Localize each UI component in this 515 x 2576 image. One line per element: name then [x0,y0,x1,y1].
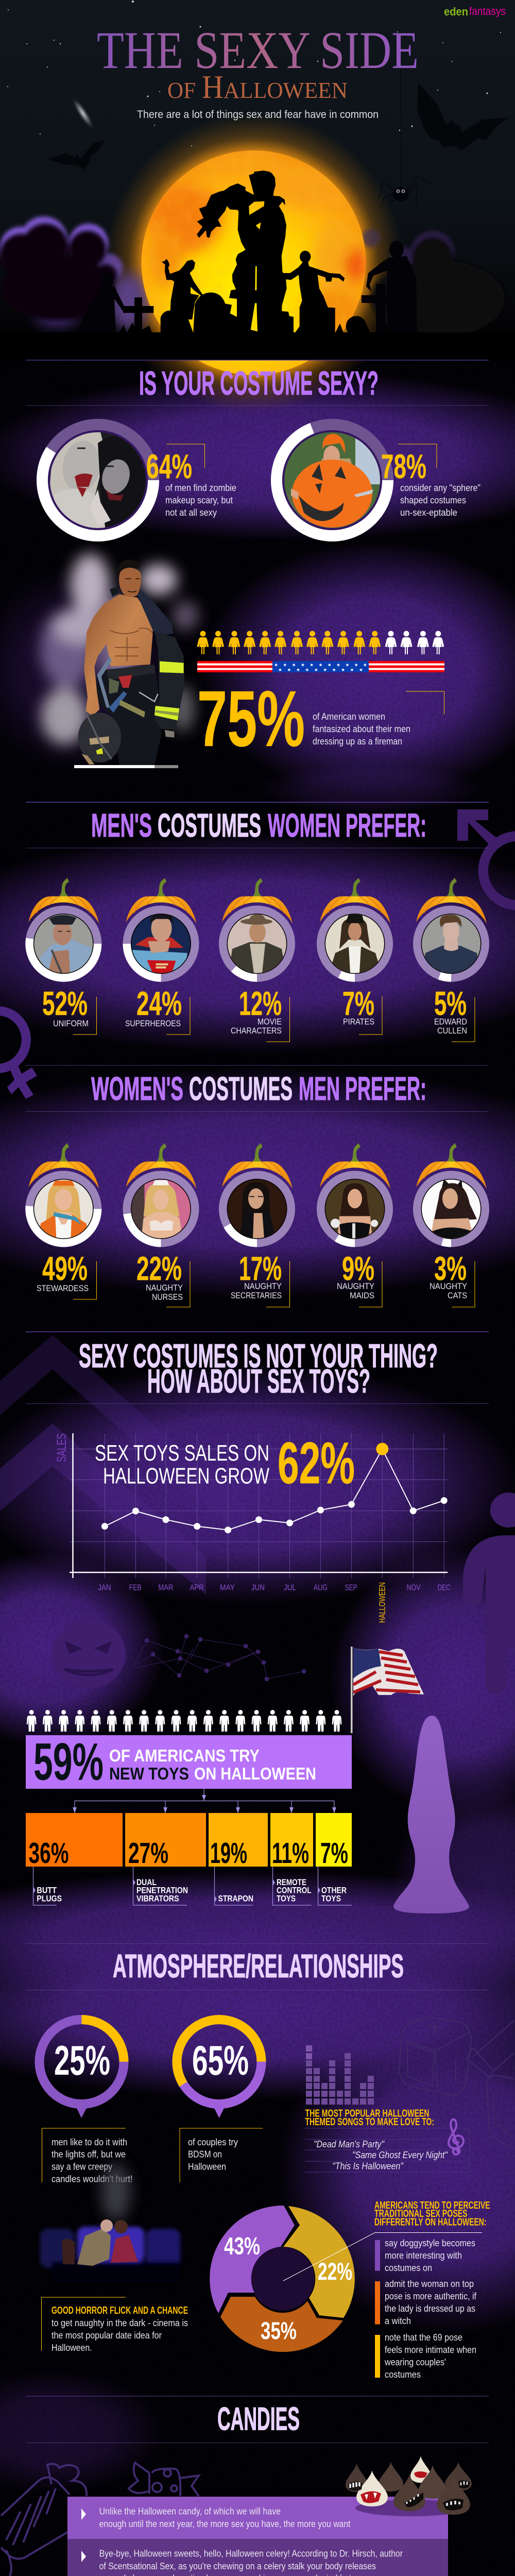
icon: treble clef [449,2120,464,2155]
65 percent caption: Halloween [188,2162,226,2172]
sex poses panel: costumes [385,2369,421,2380]
subtitle of halloween: H [202,69,224,105]
59 percent banner: OF AMERICANS TRY [109,1746,260,1765]
25 percent caption: say a few creepy [52,2162,112,2172]
candy fact 2: of Scentsational Sex, as you're chewing on a celery stalk your body releases [99,2561,376,2571]
dual penetration bar [125,1813,206,1870]
background radio sketch [399,2017,514,2147]
donut chart: 22% [318,2258,352,2285]
secretaries stat: 17% [239,1250,282,1287]
moon glow [104,113,403,412]
uniform stat: UNIFORM [53,1019,89,1028]
59 percent banner: ON HALLOWEEN [194,1764,316,1783]
25 percent caption: men like to do it with [52,2137,127,2147]
heading: CANDIES [217,2401,300,2437]
couple silhouette [123,171,367,336]
nurses stat: NAUGHTY [146,1283,183,1293]
cinema caption: Halloween. [52,2343,92,2353]
logo: eden [444,5,468,18]
toy bar labels: VIBRATORS [136,1894,179,1904]
zombie stat: not at all sexy [165,507,217,518]
subtitle of halloween: ALLOWEEN [224,78,348,103]
25 percent donut: 25% [54,2038,110,2084]
month labels: APR [190,1584,204,1592]
zombie stat: makeup scary, but [165,495,233,505]
background constellation [131,1634,306,1681]
superheroes stat: 24% [136,985,182,1022]
toy bar labels: CONTROL [277,1886,312,1895]
sex poses panel [374,2200,490,2380]
butt plugs bar: 36% [29,1837,69,1870]
flag [351,1647,424,1733]
candy fact 1 [67,2497,448,2539]
65 percent caption [180,2128,263,2182]
songs panel: "Dead Man's Party" [314,2139,385,2149]
month labels: SEP [345,1584,357,1592]
heading [91,807,426,844]
toy bar labels: STRAPON [218,1894,253,1904]
male symbol [457,809,515,910]
donut chart: 35% [261,2317,297,2344]
superheroes stat: SUPERHEROES [125,1019,181,1028]
section: candies [1,2396,489,2576]
75 percent stat: dressing up as a fireman [313,736,402,747]
halloween peak [376,1443,388,1455]
section: atmosphere and relationships [26,1943,514,2380]
cats stat: 3% [434,1250,467,1287]
title: THE SEXY SIDE [97,21,419,80]
pumpkin donut [277,425,388,536]
edward cullen donut [416,878,487,978]
toy bar labels: BUTT [37,1886,57,1895]
naughty secretaries donut [222,1143,293,1243]
25 percent caption: candles wouldn't hurt! [52,2174,133,2184]
movie stat [231,985,289,1042]
heading [79,1337,438,1400]
section: mens costumes [26,802,489,1042]
zombie stat [146,444,236,518]
pumpkin stat: consider any "sphere" [400,483,480,493]
edward stat: EDWARD [434,1017,467,1026]
remote control bar [270,1813,313,1870]
songs panel [305,2108,470,2172]
nurses stat [136,1250,190,1307]
candy fact 1: enough until the next year, the more sex you have, the more you want [99,2519,350,2529]
chart headline: HALLOWEEN GROW [103,1463,269,1489]
sex poses panel: pose is more authentic, if [385,2291,477,2301]
month labels: MAR [158,1584,173,1592]
zombie donut [42,425,153,536]
toy bar labels: REMOTE [277,1877,306,1887]
dual penetration bar: 27% [128,1837,168,1870]
tagline: There are a lot of things sex and fear have in common [137,109,379,121]
section: womens costumes [26,1065,489,1307]
pirates stat: PIRATES [343,1017,374,1026]
59 percent banner [26,1732,352,1791]
uniform donut [28,878,99,978]
bat right [417,83,509,150]
strapon bar: 19% [210,1837,247,1870]
graveyard zombies and tombs [162,259,202,319]
stars [7,1,501,146]
65 percent caption: of couples try [188,2137,238,2147]
maids stat: NAUGHTY [337,1281,374,1291]
logo: fantasys [469,5,506,18]
section: sex toys [26,1332,489,1913]
left clouds [0,216,148,330]
edward stat: CULLEN [437,1026,467,1036]
toy bar labels: OTHER [321,1886,347,1895]
movie stat: MOVIE [258,1017,282,1026]
75 percent stat: fantasized about their men [313,724,410,734]
cinema caption [41,2297,188,2353]
59 percent banner: NEW TOYS [109,1764,189,1783]
25 percent donut [39,2020,124,2118]
month labels [98,1582,450,1623]
songs panel: THE MOST POPULAR HALLOWEEN [305,2108,430,2120]
female symbol [0,1006,37,1099]
sex poses panel: feels more intimate when [385,2345,476,2355]
stewardess stat [37,1250,97,1299]
chocolate kisses [346,2456,472,2516]
secretaries stat: NAUGHTY [244,1281,282,1291]
22 percent segment [283,2206,355,2318]
sex poses panel: a witch [385,2316,411,2326]
movie stat: CHARACTERS [231,1026,282,1036]
strapon bar [209,1813,268,1870]
american flag bar: ★★★★★★★★★★ [278,668,363,673]
heading: COSTUMES [189,1070,293,1107]
men pictogram row [27,1710,341,1732]
75 percent stat: of American women [313,711,385,722]
american flag bar [197,661,444,673]
pumpkin stat: shaped costumes [400,495,466,505]
candy fact 1: Unlike the Halloween candy, of which we will have [99,2506,281,2517]
month labels: JAN [98,1584,111,1592]
uniform stat [42,985,97,1035]
chart headline [95,1431,355,1496]
month labels: NOV [407,1584,421,1592]
line chart [55,1431,450,1623]
toy silhouette [393,1716,469,1913]
month labels: JUN [251,1584,265,1592]
logo [444,5,506,18]
uniform stat: 52% [42,985,88,1022]
pumpkin stat: 78% [381,447,426,485]
songs panel: THEMED SONGS TO MAKE LOVE TO: [305,2116,434,2128]
background jack-o-lantern [52,1616,126,1688]
sex poses panel: the lady is dressed up as [385,2303,475,2314]
fireman [78,560,184,765]
section: is your costume sexy [26,364,489,768]
songs panel: "This Is Halloween" [332,2161,404,2171]
data points [101,1497,448,1533]
sex poses panel: note that the 69 pose [385,2332,462,2343]
pirates donut [320,878,390,978]
month labels: MAY [220,1584,235,1592]
25 percent caption: the lights off, but we [52,2149,126,2160]
month labels: DEC [438,1584,450,1592]
women pictogram row [197,631,444,654]
fireman caption bar [74,765,178,768]
butt plugs bar [26,1813,123,1870]
superheroes donut [126,878,197,978]
35 percent segment [220,2297,343,2352]
right clouds [362,229,505,337]
background chevrons [0,1335,247,1595]
stewardess stat: STEWARDESS [37,1283,89,1293]
month labels: HALLOWEEN [377,1582,387,1623]
naughty nurses donut [126,1143,197,1243]
bat left [47,141,105,170]
background person icon [463,1493,515,1694]
stewardess donut [28,1143,99,1243]
month labels: FEB [129,1584,142,1592]
25 percent caption [42,2128,133,2184]
chart axes [70,1433,448,1578]
edward stat [434,985,475,1042]
equalizer icon [306,2045,374,2105]
remote control bar: 11% [272,1837,309,1870]
65 percent donut: 65% [192,2038,249,2084]
cinema caption: to get naughty in the dark - cinema is [52,2318,188,2328]
movie stat: 12% [239,985,282,1022]
maids stat [337,1250,382,1307]
toy bar labels: PLUGS [37,1894,62,1904]
naughty maids donut [320,1143,390,1243]
65 percent caption: BDSM on [188,2149,222,2160]
75 percent stat: 75% [197,674,305,763]
75 percent stat [197,674,444,763]
zombie stat: of men find zombie [165,483,236,493]
spider [379,69,430,206]
heading: COSTUMES [158,807,261,844]
donut chart [210,2206,482,2352]
cinema couple photo [40,2164,180,2282]
nurses stat: NURSES [152,1292,183,1302]
maids stat: MAIDS [350,1291,374,1300]
candy fact 2 [67,2539,448,2576]
pirates stat [342,985,382,1035]
pirates stat: 7% [342,985,374,1022]
far zombies and crosses [77,241,417,335]
month labels: AUG [314,1584,328,1592]
edward stat: 5% [434,985,467,1022]
zombie stat: 64% [146,447,192,485]
59 percent banner: 59% [33,1732,104,1791]
naughty cats donut [416,1143,487,1243]
other toys bar [316,1813,352,1870]
superheroes stat [125,985,190,1035]
toy bar labels: DUAL [136,1877,157,1887]
toy bar labels: TOYS [277,1894,296,1904]
toy bar labels: PENETRATION [136,1886,188,1895]
sex poses panel: more interesting with [385,2250,462,2261]
toy bar labels: TOYS [321,1894,341,1904]
chart headline: 62% [278,1431,355,1496]
cats stat [430,1250,475,1307]
65 percent donut [161,2004,277,2120]
galaxy [69,95,97,131]
sex poses panel: say doggystyle becomes [385,2238,475,2248]
pumpkin stat [381,444,480,518]
donut chart: 43% [224,2232,260,2260]
background candy sketches [1,2463,199,2576]
subtitle of halloween [167,69,348,105]
ground [0,322,515,360]
stewardess stat: 49% [42,1250,88,1287]
chart grid [70,1433,448,1578]
subtitle of halloween: OF [167,78,196,103]
cats stat: CATS [448,1291,467,1300]
moon [139,149,368,376]
heading: WOMEN'S [91,1070,183,1107]
cinema caption: the most popular date idea for [52,2330,162,2341]
header scene [0,1,515,412]
heading [91,1070,426,1107]
toy bar labels [33,1867,352,1905]
nurses stat: 22% [136,1250,182,1287]
songs panel: "Same Ghost Every Night" [352,2150,448,2160]
maids stat: 9% [342,1250,374,1287]
sex poses panel: costumes on [385,2263,432,2273]
cats stat: NAUGHTY [430,1281,467,1291]
secretaries stat [231,1250,289,1307]
smoke [40,554,198,744]
candy fact 2: Bye-bye, Halloween sweets, hello, Halloween celery! According to Dr. Hirsch, author [99,2549,403,2559]
toy bars [26,1813,352,1870]
sex poses panel: TRADITIONAL SEX POSES [374,2208,468,2219]
month labels: JUL [284,1584,296,1592]
pumpkin stat: un-sex-eptable [400,507,457,518]
other toys bar: 7% [320,1837,348,1870]
secretaries stat: SECRETARIES [231,1291,282,1300]
chart headline: SEX TOYS SALES ON [95,1440,269,1466]
sex poses panel: admit the woman on top [385,2279,474,2289]
43 percent segment [210,2206,295,2313]
tree connector arrows [73,1789,336,1813]
american flag bar: ★★★★★★★★★★★ [274,663,367,668]
heading: MEN'S [91,807,152,844]
sales line [105,1449,444,1530]
y axis label: SALES [55,1433,69,1462]
cinema caption: GOOD HORROR FLICK AND A CHANCE [52,2305,188,2316]
sex poses panel: wearing couples' [384,2357,446,2367]
movie characters donut [222,878,293,978]
candy text panel [67,2497,448,2576]
